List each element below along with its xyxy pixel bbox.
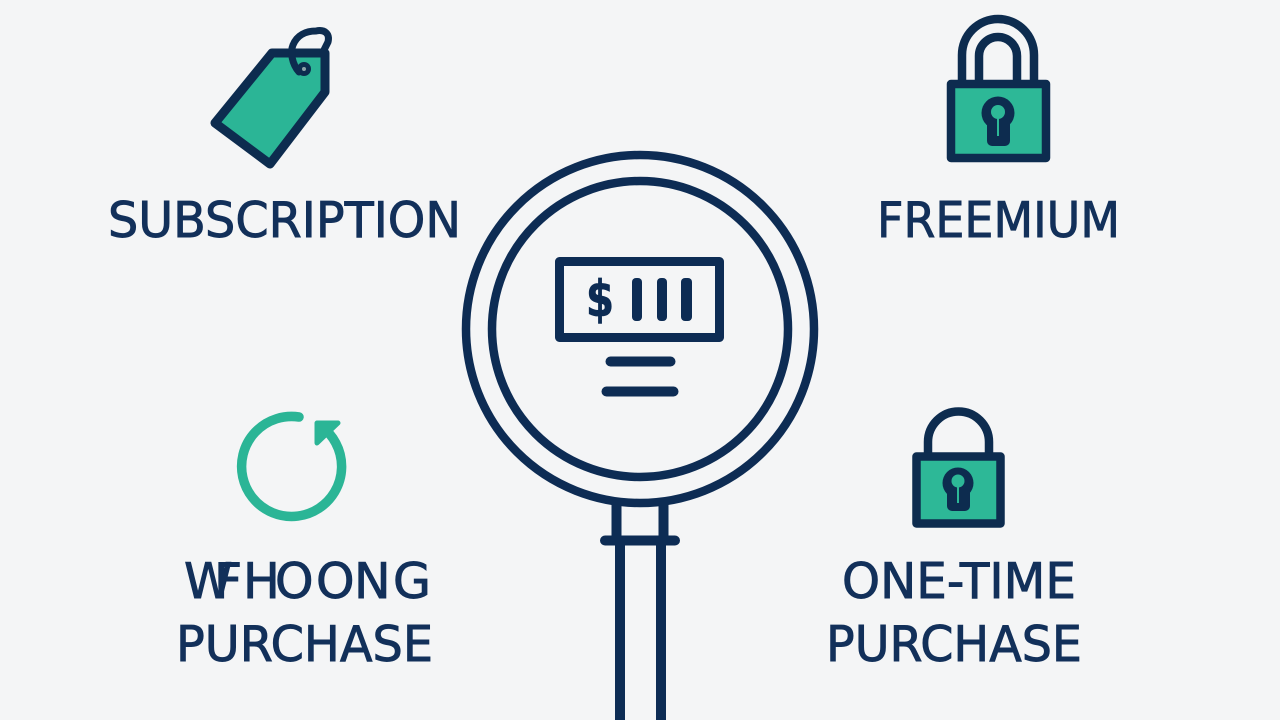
dollar sign: $ <box>586 270 614 328</box>
icon: small padlock <box>916 411 1000 524</box>
magnifying glass <box>466 155 814 720</box>
icon: price tag <box>215 31 328 164</box>
handle <box>605 502 675 720</box>
label: subscription: SUBSCRIPTION <box>108 192 461 249</box>
label: garbled purchase type: WFHOONG <box>184 553 431 610</box>
label: purchase right: PURCHASE <box>826 616 1082 673</box>
label: purchase left: PURCHASE <box>176 616 433 673</box>
icon: large padlock <box>951 19 1046 158</box>
description lines <box>606 362 674 392</box>
label: freemium: FREEMIUM <box>877 192 1120 249</box>
lens inner ring <box>492 181 788 477</box>
icon: price display <box>560 262 720 392</box>
price bars <box>632 278 642 321</box>
label: one-time: ONE-TIME <box>842 553 1076 610</box>
icon: refresh arrow <box>242 416 342 516</box>
lens outer ring <box>466 155 814 503</box>
